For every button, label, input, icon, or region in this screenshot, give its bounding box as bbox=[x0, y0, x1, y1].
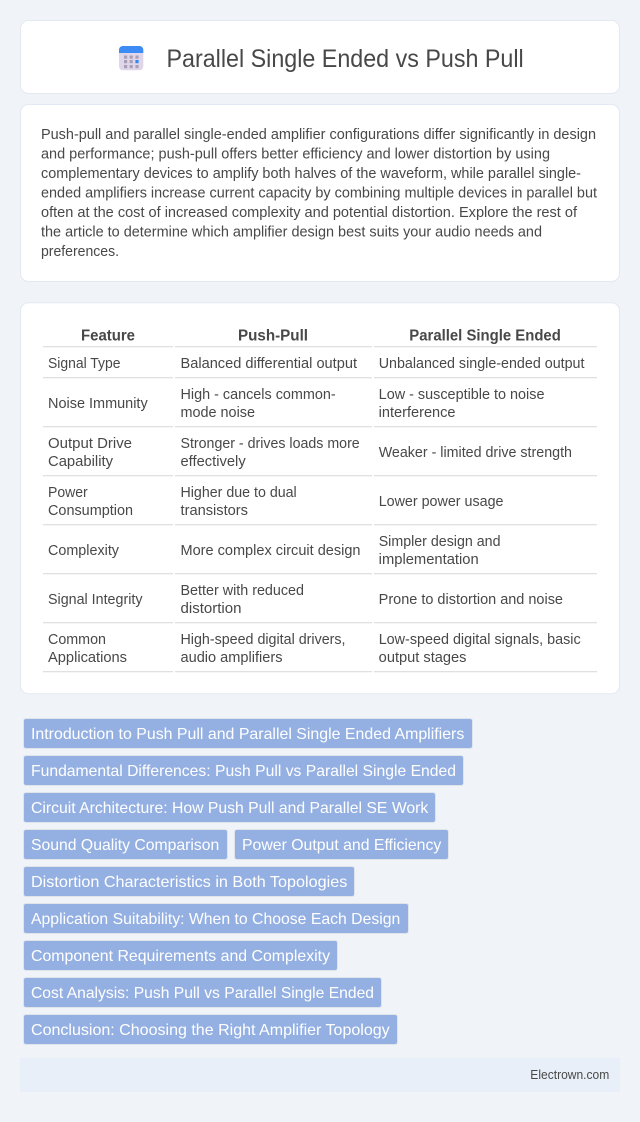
table row: complexity: Complexity bbox=[48, 543, 120, 559]
table row: output drive capability: Output Drive bbox=[48, 436, 132, 452]
tag: power output: Power Output and Efficiency bbox=[242, 837, 441, 854]
text block: intro paragraph: and performance; push-pull offers better efficiency and lower distortion by using bbox=[41, 146, 550, 162]
text block: intro paragraph: ended amplifiers increase current capacity by combining multiple devices in parallel but bbox=[41, 186, 597, 202]
tag: circuit architecture bbox=[24, 792, 436, 822]
icon: calendar grid bbox=[119, 46, 143, 70]
table row: common applications: Low-speed digital signals, basic bbox=[379, 632, 581, 648]
table row: signal integrity: Prone to distortion and noise bbox=[379, 592, 563, 608]
tag: sound quality: Sound Quality Comparison bbox=[31, 837, 219, 854]
title: Parallel Single Ended vs Push Pull bbox=[166, 45, 524, 73]
table row: signal type: Signal Type bbox=[48, 356, 120, 372]
tag: application suitability: Application Suitability: When to Choose Each Design bbox=[31, 911, 400, 928]
panel: comparison table bbox=[20, 303, 620, 694]
table header row: Parallel Single Ended bbox=[409, 328, 561, 344]
text block: intro paragraph: preferences. bbox=[41, 244, 119, 260]
table row: power consumption: transistors bbox=[180, 503, 248, 519]
table row: power consumption: Power bbox=[48, 485, 88, 501]
panel: topic tags bbox=[24, 718, 472, 1044]
tag: introduction bbox=[24, 718, 472, 748]
tag: distortion: Distortion Characteristics in Both Topologies bbox=[31, 874, 347, 891]
tag: component requirements bbox=[24, 940, 338, 970]
text block: intro paragraph: Push-pull and parallel single-ended amplifier configurations differ significantly in design bbox=[41, 127, 596, 143]
tag: circuit architecture: Circuit Architecture: How Push Pull and Parallel SE Work bbox=[31, 800, 429, 817]
panel: title header bbox=[20, 20, 620, 94]
table row: common applications: High-speed digital drivers, bbox=[180, 632, 346, 648]
tag: sound quality bbox=[24, 830, 228, 860]
table row: signal integrity: Better with reduced bbox=[180, 583, 304, 599]
table row: noise immunity: High - cancels common- bbox=[180, 387, 336, 403]
footer: source credit: Electrown.com bbox=[530, 1068, 609, 1082]
table row: power consumption: Lower power usage bbox=[379, 494, 504, 510]
tag: component requirements: Component Requirements and Complexity bbox=[31, 948, 330, 965]
table row: common applications: Applications bbox=[48, 650, 127, 666]
table header row: Feature bbox=[81, 328, 135, 344]
table row: complexity: Simpler design and bbox=[379, 534, 500, 550]
table row: signal integrity: Signal Integrity bbox=[48, 592, 143, 608]
table row: output drive capability: effectively bbox=[180, 454, 247, 470]
tag: conclusion: Conclusion: Choosing the Right Amplifier Topology bbox=[31, 1022, 390, 1039]
table row: signal type: Balanced differential output bbox=[180, 356, 357, 372]
table row: common applications: Common bbox=[48, 632, 106, 648]
table row: signal type bbox=[43, 356, 597, 378]
text block: intro paragraph: complementary devices to amplify both halves of the waveform, while parallel single- bbox=[41, 166, 581, 182]
tag: distortion bbox=[24, 866, 354, 896]
table row: output drive capability: Weaker - limited drive strength bbox=[379, 445, 572, 461]
tag: conclusion bbox=[24, 1014, 398, 1044]
table row: noise immunity: Noise Immunity bbox=[48, 396, 148, 412]
table row: noise immunity: Low - susceptible to noise bbox=[379, 387, 544, 403]
tag: cost analysis bbox=[24, 978, 382, 1008]
table row: noise immunity: interference bbox=[379, 405, 456, 421]
footer: source credit bbox=[20, 1058, 620, 1092]
panel: introduction bbox=[20, 104, 620, 282]
tag: fundamental differences: Fundamental Differences: Push Pull vs Parallel Single Ended bbox=[31, 763, 456, 780]
table row: common applications bbox=[43, 632, 597, 672]
table row: output drive capability: Stronger - drives loads more bbox=[180, 436, 360, 452]
table row: signal type: Unbalanced single-ended output bbox=[379, 356, 584, 372]
table row: output drive capability: Capability bbox=[48, 454, 114, 470]
tag: introduction: Introduction to Push Pull and Parallel Single Ended Amplifiers bbox=[31, 726, 464, 743]
table row: common applications: audio amplifiers bbox=[180, 650, 282, 666]
tag: cost analysis: Cost Analysis: Push Pull vs Parallel Single Ended bbox=[31, 985, 374, 1002]
text block: intro paragraph: the article to determine which amplifier design best suits your audio needs and bbox=[41, 224, 542, 240]
table row: complexity bbox=[43, 534, 597, 574]
text block: intro paragraph bbox=[41, 127, 597, 260]
tag: application suitability bbox=[24, 904, 408, 934]
table row: common applications: output stages bbox=[379, 650, 466, 666]
table row: noise immunity: mode noise bbox=[180, 405, 255, 421]
table row: signal integrity bbox=[43, 583, 597, 623]
table row: complexity: More complex circuit design bbox=[180, 543, 360, 559]
text block: intro paragraph: often at the cost of increased complexity and potential distortion. Explore the rest of bbox=[41, 205, 578, 221]
table row: power consumption: Consumption bbox=[48, 503, 133, 519]
table row: signal integrity: distortion bbox=[180, 601, 242, 617]
table row: power consumption bbox=[43, 485, 597, 525]
table row: noise immunity bbox=[43, 387, 597, 427]
tag: fundamental differences bbox=[24, 756, 464, 786]
table row: power consumption: Higher due to dual bbox=[180, 485, 297, 501]
table header row bbox=[43, 328, 597, 347]
table row: complexity: implementation bbox=[379, 552, 479, 568]
table header row: Push-Pull bbox=[238, 328, 308, 344]
table row: output drive capability bbox=[43, 436, 597, 476]
tag: power output bbox=[234, 830, 448, 860]
